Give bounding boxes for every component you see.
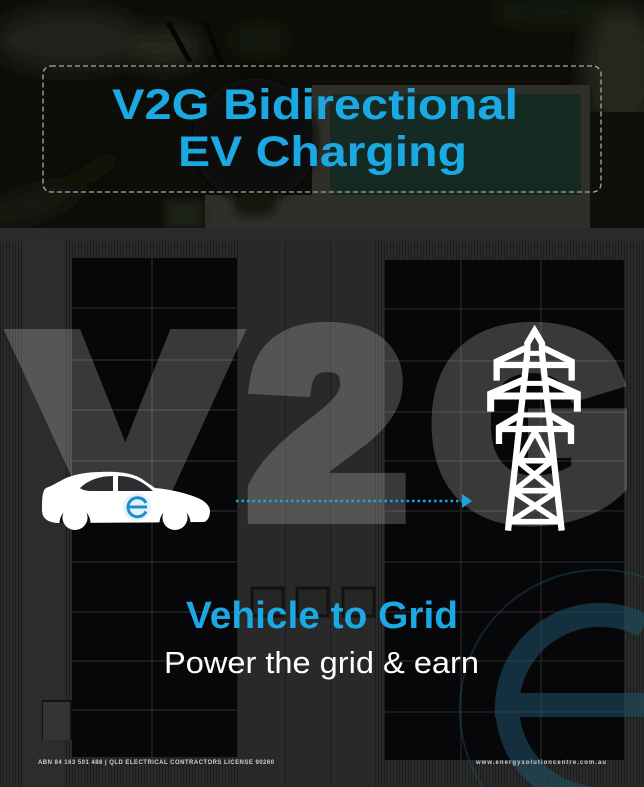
solar panel array: right xyxy=(385,260,624,760)
dashed frame xyxy=(43,66,601,192)
title: V2G Bidirectional xyxy=(112,81,518,129)
spire xyxy=(527,331,542,355)
top arm xyxy=(495,348,574,381)
title xyxy=(112,81,518,176)
lower arm xyxy=(497,414,573,444)
main legs xyxy=(508,353,562,531)
background: corrugated roof xyxy=(0,228,644,787)
icon: car with logo xyxy=(42,472,210,530)
background: aerial garden and pool photo xyxy=(0,0,644,232)
watermark: large V2G letters: G xyxy=(432,279,632,568)
pool deck xyxy=(205,85,590,228)
watermark: large V2G letters: V xyxy=(21,286,229,565)
lattice bracing xyxy=(510,432,561,522)
watermark: large V2G letters xyxy=(4,322,627,526)
roof hatch xyxy=(42,700,75,740)
solar panel array: left xyxy=(72,258,237,757)
roof skylights xyxy=(252,588,374,616)
icon: transmission tower xyxy=(488,331,580,531)
wheels xyxy=(62,505,188,530)
wheel arches xyxy=(60,508,190,523)
windows xyxy=(80,476,153,491)
footer: website: www.energysolutioncentre.com.au xyxy=(475,760,606,766)
tagline: Power the grid & earn xyxy=(164,645,479,680)
watermark: large V2G letters: 2 xyxy=(250,279,405,568)
watermark: large company e logo xyxy=(460,570,644,787)
arrow: vehicle to grid xyxy=(236,494,472,508)
subheading: Vehicle to Grid xyxy=(186,595,458,637)
middle arm xyxy=(488,380,580,412)
footer: license details: ABN 84 163 501 488 | QLD ELECTRICAL CONTRACTORS LICENSE 90260 xyxy=(38,760,275,766)
cross bars xyxy=(522,353,548,415)
title: EV Charging xyxy=(178,128,467,176)
title box xyxy=(43,66,601,192)
car logo xyxy=(123,493,151,521)
